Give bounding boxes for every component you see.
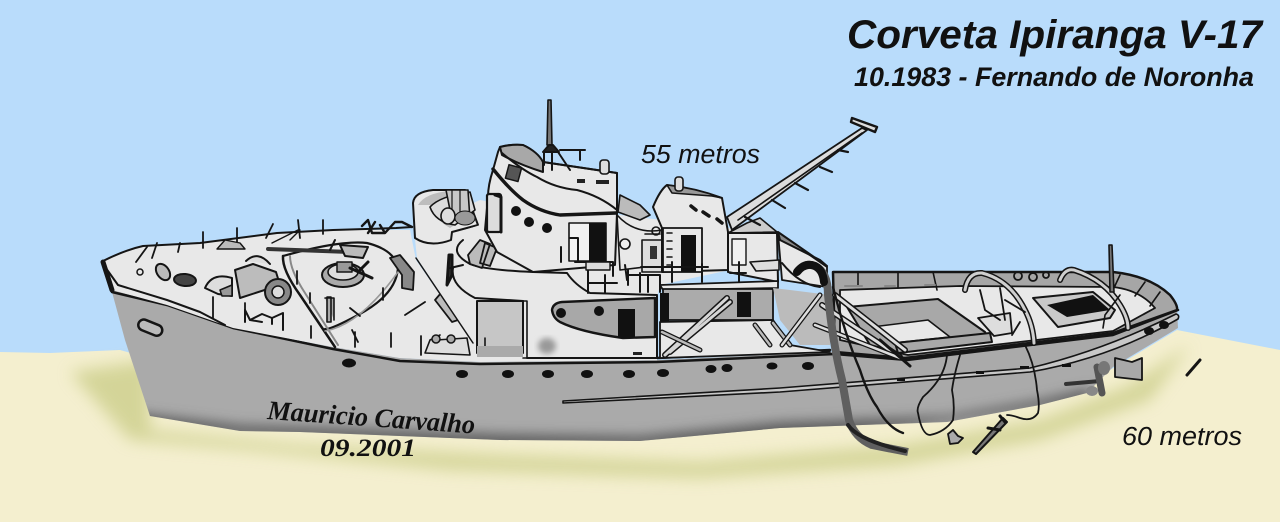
railings on platform xyxy=(561,238,660,293)
aft deck xyxy=(833,245,1177,358)
aft house xyxy=(728,218,777,233)
anchor hawse xyxy=(137,318,164,337)
crane arm debris on aft deck xyxy=(815,295,910,366)
mast xyxy=(547,100,552,145)
gray deck panel xyxy=(552,298,655,338)
signature: author: Mauricio Carvalho xyxy=(266,395,476,439)
aft mast xyxy=(1109,245,1114,292)
davit arcs xyxy=(965,270,1128,343)
deck bollards and stanchions xyxy=(136,220,425,355)
gun tub xyxy=(413,190,478,244)
winch machinery xyxy=(235,264,280,298)
boat deck bay xyxy=(660,281,778,290)
title: Corveta Ipiranga V-17 xyxy=(847,13,1264,57)
gun mount xyxy=(322,263,364,287)
bridge xyxy=(485,145,617,272)
propeller and rudder xyxy=(1066,358,1142,396)
superstructure xyxy=(413,100,830,362)
hatch tray xyxy=(847,299,992,353)
subtitle: 10.1983 - Fernando de Noronha xyxy=(854,62,1254,92)
bow deck xyxy=(103,220,482,362)
upper platform xyxy=(456,222,657,295)
gray bay door xyxy=(477,301,523,353)
depth label: 55 metros: 55 metros xyxy=(641,141,760,169)
black hatch box xyxy=(1033,292,1115,327)
crane xyxy=(727,118,877,230)
seabed: sand xyxy=(0,330,1280,522)
ship hull xyxy=(110,290,1180,441)
midship house xyxy=(617,215,662,270)
gun tub ring xyxy=(283,243,398,329)
rub rail xyxy=(563,314,1179,403)
collapsed white shroud xyxy=(778,233,827,287)
depth label: 60 metros: 60 metros xyxy=(1122,423,1242,451)
hose and cables xyxy=(797,265,1039,452)
lower deckhouse xyxy=(414,200,778,362)
hull portholes xyxy=(342,321,1169,381)
signature: date: 09.2001 xyxy=(320,435,416,462)
deck fittings xyxy=(245,310,283,330)
seabed debris xyxy=(948,360,1200,454)
funnel xyxy=(653,185,728,272)
ship: wreck illustration xyxy=(103,100,1200,454)
aft deck machinery xyxy=(978,272,1049,336)
